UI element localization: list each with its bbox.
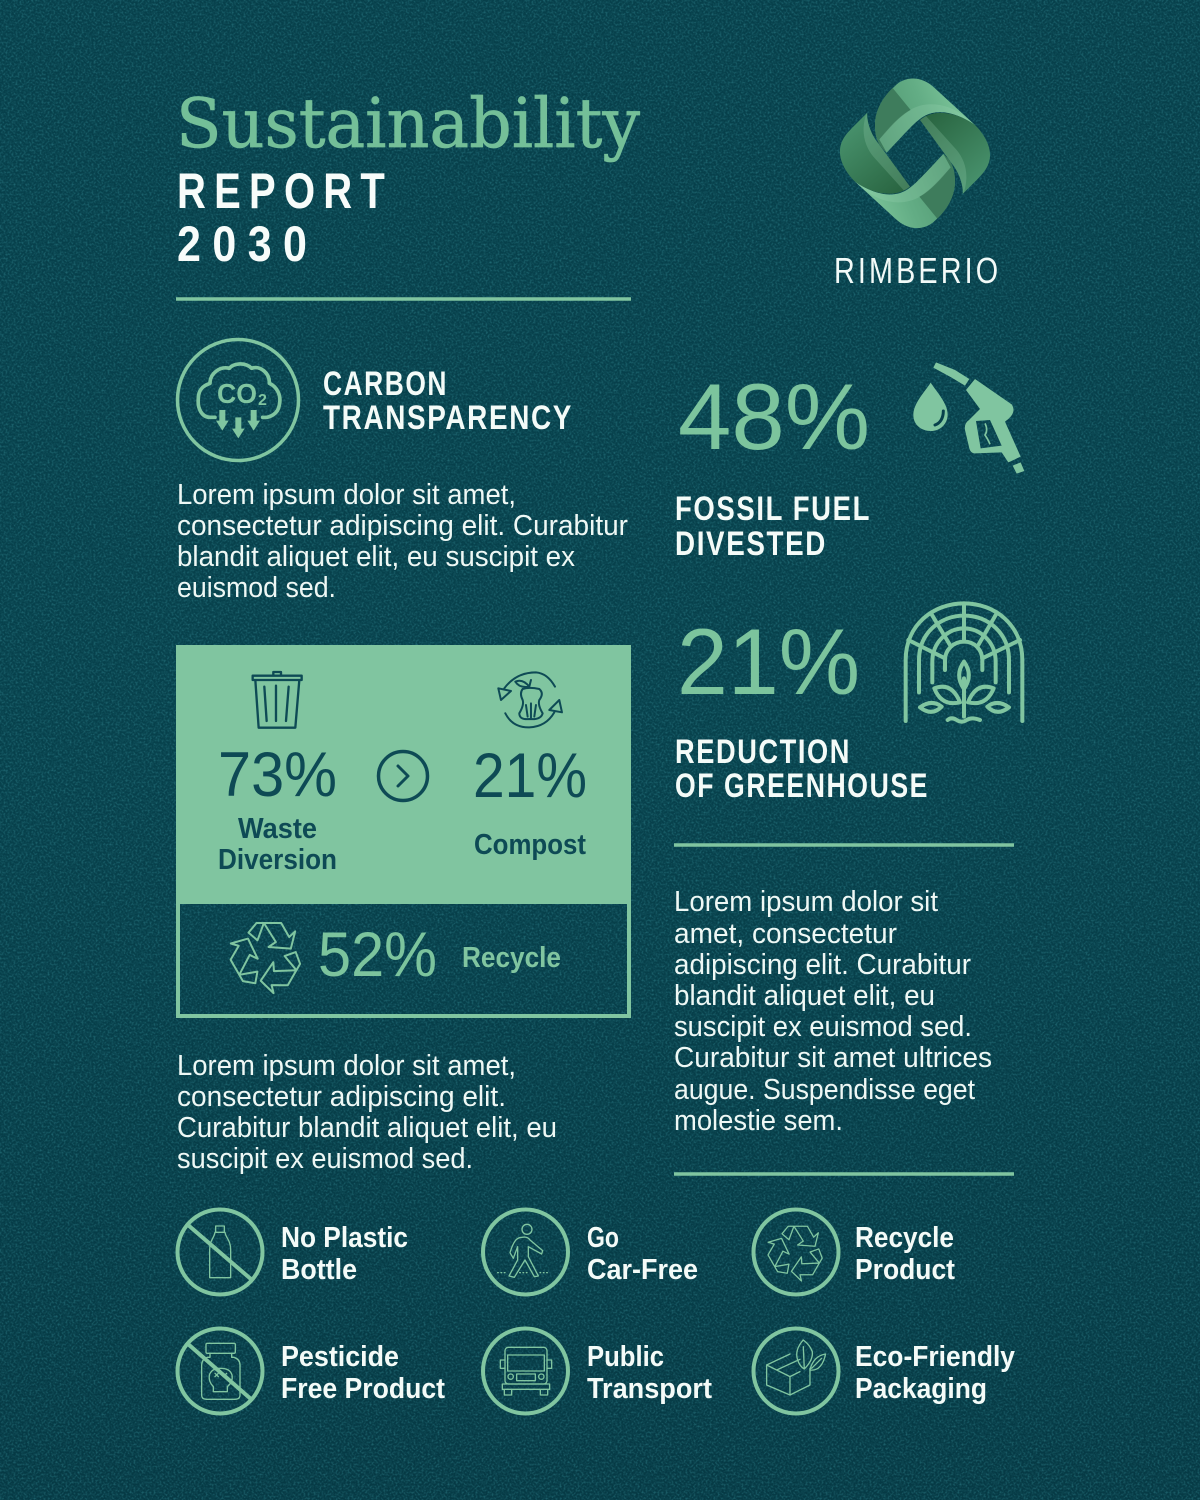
stat: 73%: 73% [218,740,337,810]
label: Packaging [855,1373,987,1405]
panel: carbon transparency [177,340,628,604]
icon: recycle in circle [754,1210,838,1294]
heading: carbon transparency: TRANSPARENCY [323,399,573,437]
icon: compost cycle [498,672,562,727]
icon: walking person [483,1210,568,1294]
label: reduction of greenhouse: OF GREENHOUSE [675,767,929,805]
stat: 21%: 21% [677,609,860,714]
icon: greenhouse plant [906,603,1022,722]
label [855,1341,1015,1405]
label: waste diversion: Waste [238,813,317,845]
text block: right description: Curabitur sit amet ultrices [674,1042,992,1074]
heading: Sustainability: Sustainability [176,85,641,164]
icon: CO2 cloud: 2 [258,392,267,409]
heading: Report: REPORT [177,163,393,219]
stat: 52%: 52% [318,920,437,990]
label: Pesticide [281,1341,399,1373]
label: Eco-Friendly [855,1341,1015,1373]
logo: Rimberio [834,79,1001,291]
icon: bus [483,1328,568,1414]
text block: right description: molestie sem. [674,1105,843,1137]
text block: right description: suscipit ex euismod sed. [674,1011,972,1043]
label: fossil fuel divested [675,490,871,563]
label: reduction of greenhouse: REDUCTION [675,733,851,771]
label [281,1341,445,1405]
label: compost: Compost [474,829,586,861]
panel: waste stats [176,645,631,1016]
text block: carbon description [177,479,628,604]
label: No Plastic [281,1222,408,1254]
stat: 48%: 48% [678,364,870,469]
label: Go [587,1222,619,1254]
text block: right description: blandit aliquet elit, eu [674,980,935,1012]
text block: waste description: Curabitur blandit aliquet elit, eu [177,1112,557,1144]
item: eco-friendly packaging [754,1328,1015,1414]
label: Bottle [281,1254,357,1286]
label: waste diversion: Diversion [218,844,337,876]
logo wordmark: RIMBERIO [834,250,1001,291]
text block: waste description [177,1050,557,1175]
label: Product [855,1254,955,1286]
item: pesticide free product [178,1328,445,1414]
panel: fossil fuel stat [675,362,1024,563]
heading: 2030: 2030 [177,216,318,272]
item: recycle product [754,1210,955,1294]
label: fossil fuel divested: DIVESTED [675,525,827,563]
icon: recycle [224,923,304,997]
label [855,1222,955,1286]
label: Free Product [281,1373,445,1405]
title [176,85,641,272]
label: Car-Free [587,1254,698,1286]
label: Public [587,1341,664,1373]
label: fossil fuel divested: FOSSIL FUEL [675,490,871,528]
icon: CO2 cloud [178,340,298,460]
text block: right description: augue. Suspendisse eget [674,1074,975,1106]
icon: CO2 cloud: CO [217,378,257,409]
text block: carbon description: Lorem ipsum dolor sit amet, [177,479,516,511]
icon: box with leaves [754,1328,838,1414]
label: Transport [587,1373,712,1405]
panel: greenhouse stat [675,603,1022,805]
item: go car-free [483,1210,698,1294]
label: waste diversion [218,813,337,876]
heading: carbon transparency [323,365,573,437]
text block: right description: adipiscing elit. Curabitur [674,949,971,981]
icon: arrow in circle [378,752,428,800]
label: reduction of greenhouse [675,733,929,805]
label [587,1341,712,1405]
icon: fuel nozzle and drop [913,362,1024,474]
text block: waste description: consectetur adipiscing elit. [177,1081,506,1113]
icon: ribbon mark [840,79,990,228]
text block: carbon description: euismod sed. [177,572,336,604]
text block: carbon description: consectetur adipiscing elit. Curabitur [177,510,628,542]
item: public transport [483,1328,712,1414]
icon: crossed poison jar [178,1328,262,1414]
text block: right description: Lorem ipsum dolor sit [674,886,938,918]
text block: right description [674,886,992,1137]
stat: 21% compost: 21% [473,741,587,811]
label [281,1222,408,1286]
text block: waste description: suscipit ex euismod sed. [177,1143,473,1175]
label: Recycle [855,1222,954,1254]
icon: trash can [253,672,302,728]
label [587,1222,698,1286]
item: no plastic bottle [178,1210,408,1294]
text block: waste description: Lorem ipsum dolor sit amet, [177,1050,516,1082]
icon: crossed bottle [178,1210,262,1294]
label: recycle: Recycle [462,942,561,974]
heading: carbon transparency: CARBON [323,365,448,403]
text block: right description: amet, consectetur [674,918,897,950]
text block: carbon description: blandit aliquet elit, eu suscipit ex [177,541,575,573]
